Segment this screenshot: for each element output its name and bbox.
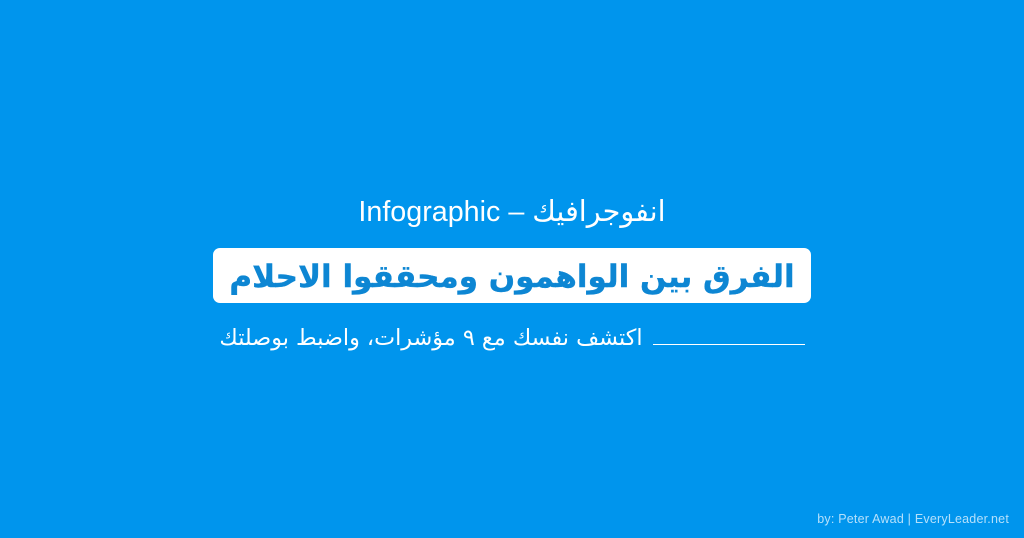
eyebrow: infographic label: انفوجرافيك – Infographic (358, 196, 666, 228)
title text: الفرق بين الواهمون ومحققوا الاحلام (229, 259, 795, 295)
credit: by: Peter Awad | EveryLeader.net (817, 512, 1009, 526)
title panel (213, 248, 811, 303)
subtitle text: اكتشف نفسك مع ٩ مؤشرات، واضبط بوصلتك (219, 325, 643, 351)
subtitle line (653, 344, 805, 345)
